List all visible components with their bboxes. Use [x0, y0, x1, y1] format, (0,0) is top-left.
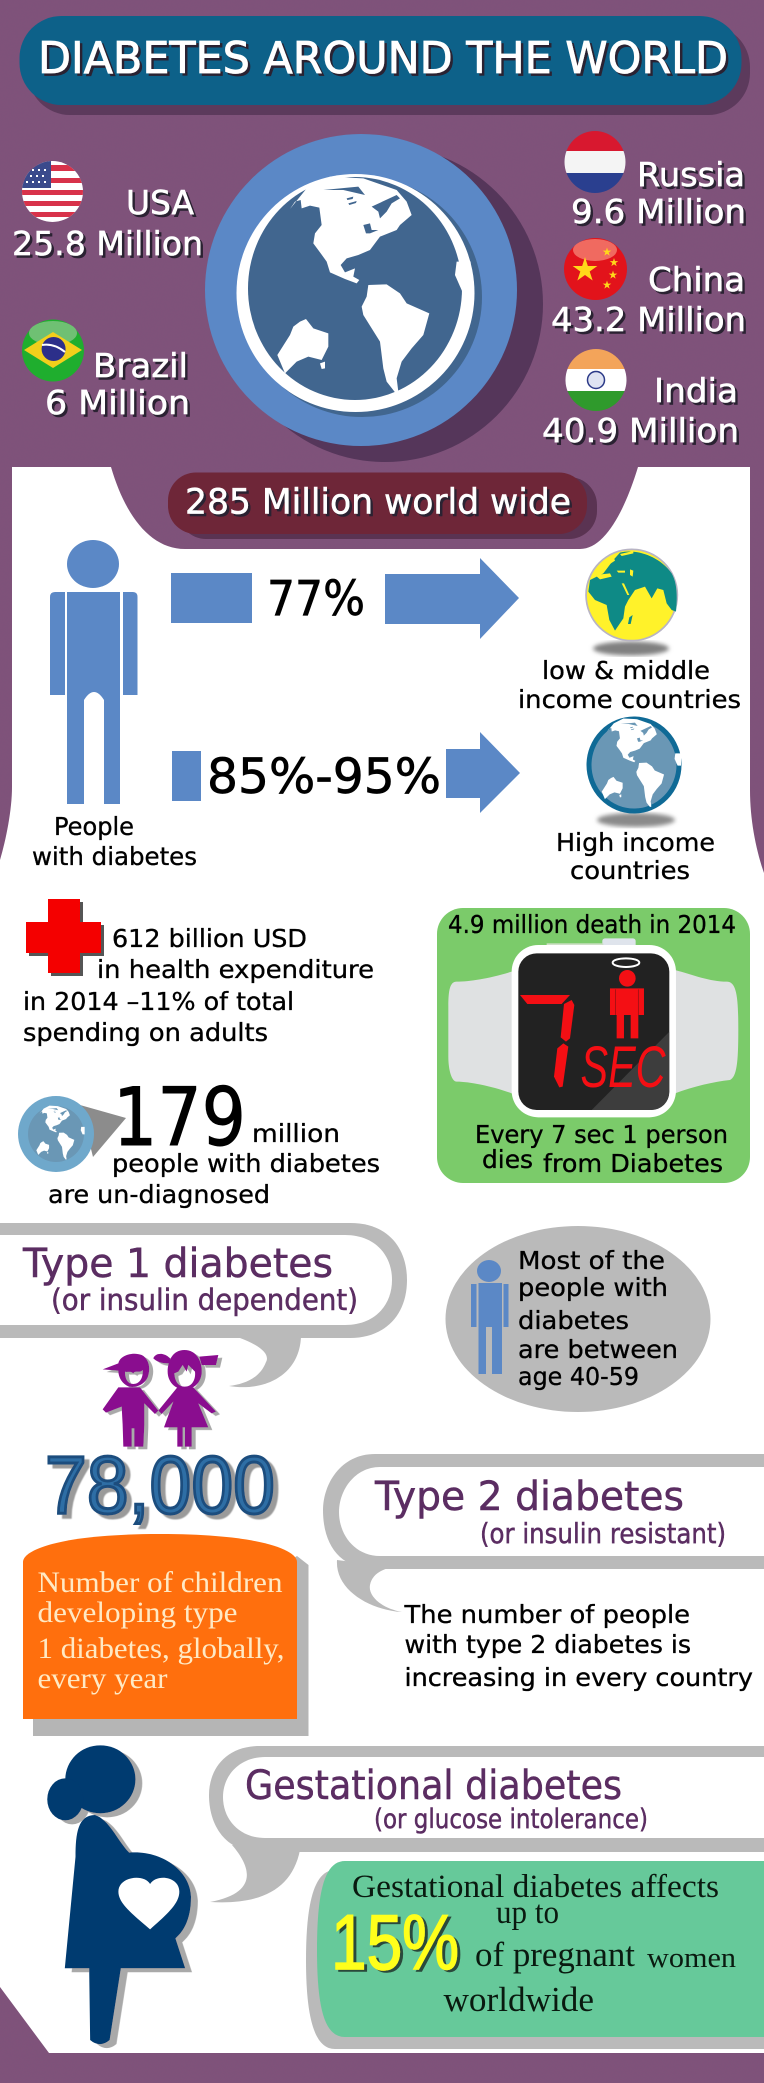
speech bubble: gestational diabetes: Gestational diabetes	[245, 1763, 622, 1809]
icon: pregnant woman	[47, 1745, 191, 2044]
label: high income countries: countries	[570, 856, 690, 885]
label: USA: 25.8 Million	[12, 224, 203, 263]
label: Russia: 9.6 Million	[571, 192, 746, 231]
text: 179 million undiagnosed: million	[252, 1119, 340, 1148]
panel: white content area	[0, 467, 764, 2053]
callout: age 40-59: age 40-59	[518, 1362, 639, 1391]
title banner	[20, 16, 750, 115]
speech bubble: type 1 diabetes: Type 1 diabetes	[22, 1241, 333, 1287]
stat: 78,000: 78,000	[45, 1440, 275, 1531]
text: health expenditure	[23, 924, 374, 1047]
text: 179 million undiagnosed: are un-diagnosed	[48, 1180, 270, 1209]
label: USA	[12, 183, 203, 263]
panel: gestational statistic	[306, 1861, 764, 2049]
label: China: 43.2 Million	[551, 300, 746, 339]
label: low and middle income countries	[518, 656, 741, 714]
text: 179 million undiagnosed	[48, 1071, 380, 1209]
arrow: 77 percent	[171, 558, 519, 639]
callout: age 40-59: people with	[518, 1273, 668, 1302]
panel: death every 7 seconds: 4.9 million death in 2014	[448, 910, 736, 939]
text: 179 million undiagnosed: people with diabetes	[112, 1149, 380, 1178]
label: USA: USA	[126, 183, 194, 222]
text: type 2 increasing: with type 2 diabetes is	[404, 1630, 691, 1659]
icon: yellow globe	[585, 548, 678, 656]
icon: children	[103, 1350, 218, 1447]
panel: gestational statistic: worldwide	[444, 1980, 594, 2019]
text: type 2 increasing: increasing in every country	[404, 1663, 753, 1692]
label: low and middle income countries: low & middle	[542, 656, 710, 685]
text: health expenditure: 612 billion USD	[112, 924, 307, 953]
icon: smart watch: SEC	[580, 1035, 666, 1100]
label: people with diabetes: People	[54, 812, 134, 841]
label: Brazil: 6 Million	[45, 383, 190, 422]
speech bubble: type 1 diabetes	[0, 1223, 407, 1387]
panel: children developing type 1: 1 diabetes, globally,	[38, 1632, 284, 1665]
text: type 2 increasing	[403, 1600, 753, 1692]
label: India: India	[654, 371, 738, 410]
speech bubble: gestational diabetes	[209, 1746, 764, 1902]
icon: magnified globe	[18, 1096, 126, 1172]
flag: India	[565, 349, 627, 412]
label: people with diabetes: with diabetes	[32, 842, 197, 871]
text: 179 million undiagnosed: 179	[113, 1071, 246, 1164]
text: health expenditure: in health expenditure	[97, 955, 374, 984]
panel: gestational statistic: 15%	[331, 1898, 459, 1986]
flag: China	[564, 238, 627, 300]
icon: smart watch	[448, 938, 738, 1117]
text: type 2 increasing: The number of people	[403, 1600, 690, 1629]
label: people with diabetes	[32, 812, 197, 871]
panel: children developing type 1: developing type	[38, 1596, 238, 1629]
callout: age 40-59: Most of the	[518, 1246, 665, 1275]
flag: Russia	[564, 131, 626, 194]
label: China: China	[648, 260, 745, 299]
title banner: DIABETES AROUND THE WORLD	[38, 33, 728, 84]
icon: red cross	[26, 899, 104, 976]
panel: children developing type 1: Number of children	[38, 1566, 282, 1599]
speech bubble: gestational diabetes: (or glucose intolerance)	[374, 1804, 648, 1835]
label: Brazil: Brazil	[93, 346, 188, 385]
label: high income countries: High income	[556, 828, 715, 857]
flag: Brazil	[22, 320, 84, 382]
panel: gestational statistic: of pregnant	[475, 1935, 635, 1974]
callout: age 40-59: are between	[518, 1335, 678, 1364]
label: India: 40.9 Million	[542, 411, 739, 450]
flag: USA	[22, 161, 84, 223]
label: Russia	[571, 155, 746, 231]
panel: death every 7 seconds	[437, 908, 750, 1183]
speech bubble: type 2 diabetes	[323, 1454, 764, 1612]
panel: death every 7 seconds: dies	[482, 1145, 533, 1174]
label: India	[542, 371, 739, 450]
speech bubble: type 1 diabetes: (or insulin dependent)	[51, 1283, 358, 1317]
text: health expenditure: in 2014 –11% of total	[23, 987, 294, 1016]
panel: children developing type 1	[23, 1534, 308, 1736]
label: Brazil	[45, 346, 190, 422]
panel: gestational statistic: Gestational diabetes affects	[352, 1869, 719, 1905]
label: low and middle income countries: income countries	[518, 685, 741, 714]
panel: death every 7 seconds: from Diabetes	[543, 1149, 723, 1178]
callout: age 40-59: diabetes	[518, 1306, 629, 1335]
label: Russia: Russia	[637, 155, 745, 194]
panel: gestational statistic: women	[647, 1942, 737, 1974]
panel: children developing type 1: every year	[38, 1662, 168, 1695]
label: high income countries	[556, 828, 715, 885]
icon: person with diabetes	[50, 540, 138, 804]
icon: blue globe	[589, 719, 681, 827]
arrow: 85 to 95 percent	[172, 732, 520, 813]
panel: gestational statistic: up to	[496, 1895, 559, 1931]
arrow: 85 to 95 percent: 85%-95%	[207, 749, 441, 805]
worldwide total pill	[168, 472, 597, 539]
speech bubble: type 2 diabetes: Type 2 diabetes	[374, 1474, 684, 1520]
arrow: 77 percent: 77%	[267, 571, 365, 627]
panel: death every 7 seconds: Every 7 sec 1 person	[475, 1120, 728, 1149]
callout: age 40-59	[446, 1226, 710, 1412]
speech bubble: type 2 diabetes: (or insulin resistant)	[480, 1517, 726, 1550]
text: health expenditure: spending on adults	[23, 1018, 268, 1047]
worldwide total pill: 285 Million world wide	[185, 482, 571, 522]
icon: central globe	[205, 134, 543, 462]
label: China	[551, 260, 746, 339]
